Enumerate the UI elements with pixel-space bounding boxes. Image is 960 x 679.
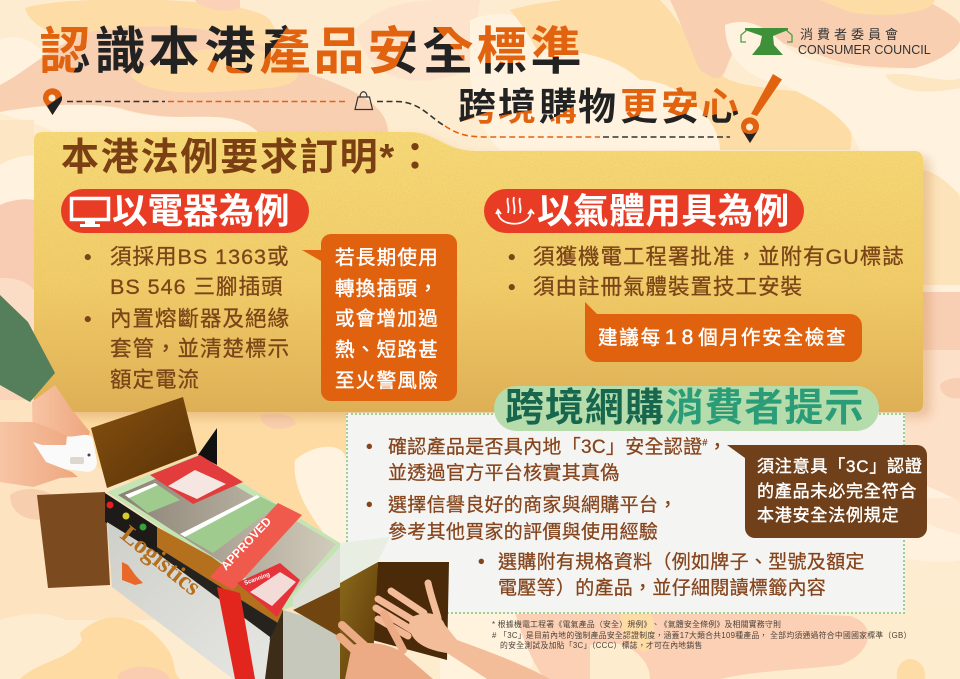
- icon: monitor: [70, 196, 110, 227]
- sleeve: [0, 295, 55, 402]
- red label: scanning: [237, 563, 300, 617]
- callout: 3C certification caveat: 須注意具「3C」認證: [757, 457, 923, 476]
- box front orange strip: [157, 527, 283, 623]
- box front black band: [105, 493, 157, 557]
- icon: heat: [495, 196, 535, 225]
- title: 標: [476, 23, 528, 80]
- title: 安: [367, 23, 418, 80]
- flap: left: [37, 492, 110, 588]
- pill: cross-border shopping tips heading: 跨境網購消費者提示: [505, 387, 864, 430]
- footnotes: 的安全測試及加貼「3C」（CCC）標誌，才可在內地銷售: [500, 641, 703, 650]
- callout: 3C certification caveat: 的產品未必完全符合: [757, 482, 917, 501]
- title: 認: [39, 23, 90, 80]
- hand: upper: [32, 385, 90, 442]
- pill: electrical appliance example: [61, 189, 309, 233]
- subtitle: 安: [661, 87, 699, 129]
- bullets: electrical requirements: 須採用BS 1363或: [110, 245, 289, 269]
- flap: rear black: [198, 428, 217, 465]
- bullets: shopping tips: 確認產品是否具內地「3C」安全認證#，: [388, 437, 727, 458]
- callout: adapter warning: 轉換插頭，: [335, 278, 439, 300]
- box right grey side: [283, 610, 340, 679]
- callout: 3C certification caveat: 本港安全法例規定: [757, 506, 899, 525]
- pill: electrical appliance example: 以電器為例: [112, 191, 290, 231]
- bullets: gas requirements: [508, 245, 905, 299]
- subtitle: 跨: [458, 87, 496, 129]
- title: 識: [94, 23, 146, 80]
- illustration: logistics box with hands: APPROVED: [218, 514, 274, 573]
- logo: consumer council: CONSUMER COUNCIL: [798, 43, 931, 57]
- box top rim: [107, 455, 340, 610]
- logo: consumer council: 消費者委員會: [800, 27, 902, 42]
- bullets: shopping tips: [366, 436, 865, 599]
- box right corner: [265, 610, 283, 679]
- callout: 18-month safety check: [585, 302, 862, 362]
- box interior: [118, 462, 336, 603]
- bullets: shopping tips: 選購附有規格資料（例如牌子、型號及額定: [498, 552, 865, 573]
- footnotes: [492, 620, 912, 650]
- bullets: shopping tips: 並透過官方平台核實其真偽: [388, 463, 620, 484]
- bullets: electrical requirements: 套管，並清楚標示: [110, 337, 290, 361]
- callout: 3C certification caveat: [727, 445, 927, 538]
- bullets: electrical requirements: •: [84, 245, 93, 269]
- tape: approved: [210, 503, 302, 590]
- title: 港: [204, 23, 256, 80]
- arm: right: [409, 613, 550, 679]
- callout: adapter warning: 至火警風險: [335, 370, 439, 392]
- scanner: [33, 435, 97, 472]
- title: 品: [313, 23, 364, 80]
- bullets: electrical requirements: 額定電流: [110, 368, 200, 392]
- bullets: gas requirements: 須由註冊氣體裝置技工安裝: [533, 275, 803, 299]
- bullets: shopping tips: 電壓等）的產品，並仔細閱讀標籤內容: [498, 578, 826, 599]
- subtitle: 心: [701, 87, 739, 129]
- title: 本: [148, 23, 200, 80]
- bullets: gas requirements: •: [508, 275, 517, 299]
- bullets: gas requirements: •: [508, 245, 517, 269]
- title: 產: [259, 23, 310, 80]
- title: [39, 23, 582, 80]
- illustration: logistics box with hands: Scanning: [244, 572, 271, 587]
- lid: brown: [293, 587, 340, 637]
- flap: pale wedge: [340, 537, 390, 583]
- logistics lettering: Logistics: [115, 521, 206, 601]
- title: 全: [422, 23, 474, 80]
- lid: white: [293, 547, 340, 610]
- callout: 18-month safety check: 建議每18個月作安全檢查: [598, 326, 847, 349]
- callout: adapter warning: [302, 234, 457, 401]
- bullets: shopping tips: •: [366, 437, 373, 458]
- bullets: electrical requirements: [84, 245, 290, 392]
- hand: lower: [0, 422, 78, 487]
- subtitle: 境: [498, 87, 536, 129]
- gold panel: [34, 132, 936, 422]
- hands: reaching right: [340, 583, 438, 665]
- flap: far-right dark brown: [372, 562, 449, 660]
- orange emblem: [122, 562, 143, 585]
- bullets: shopping tips: 參考其他買家的評價與使用經驗: [388, 522, 658, 543]
- heading: local law requires: 本港法例要求訂明*：: [61, 137, 436, 179]
- callout: adapter warning: 熱、短路甚: [335, 339, 439, 361]
- box front grey face: [107, 522, 270, 679]
- bullets: electrical requirements: BS 546 三腳插頭: [110, 275, 284, 299]
- bullets: shopping tips: •: [478, 552, 485, 573]
- subtitle: [458, 87, 739, 129]
- logo: consumer council: [740, 27, 931, 57]
- panel: cross-border tips paper: [346, 413, 905, 614]
- flap: far-right olive: [340, 562, 378, 679]
- bullets: electrical requirements: 內置熔斷器及絕緣: [110, 307, 290, 331]
- arm: left hand palm: [345, 643, 433, 679]
- bullets: electrical requirements: •: [84, 307, 93, 331]
- callout: adapter warning: 或會增加過: [335, 308, 439, 330]
- red label: handling icons: [150, 455, 243, 504]
- bullets: shopping tips: •: [366, 495, 373, 516]
- footnotes: * 根據機電工程署《電氣產品（安全）規例》、《氣體安全條例》及相關實務守則: [492, 620, 781, 629]
- bullets: shopping tips: 選擇信譽良好的商家與網購平台，: [388, 495, 678, 516]
- subtitle: 物: [578, 87, 616, 129]
- title: 準: [530, 23, 582, 80]
- callout: adapter warning: 若長期使用: [335, 247, 439, 269]
- bullets: gas requirements: 須獲機電工程署批准，並附有GU標誌: [533, 245, 905, 269]
- footnotes: # 「3C」是目前內地的強制產品安全認證制度，涵蓋17大類合共109種產品， 全部均須通過符合中國國家標準（GB）: [492, 630, 912, 640]
- subtitle: 購: [539, 87, 577, 129]
- subtitle: 更: [620, 87, 658, 129]
- pill: gas appliance example: 以氣體用具為例: [537, 191, 790, 231]
- flap: top: [91, 397, 197, 488]
